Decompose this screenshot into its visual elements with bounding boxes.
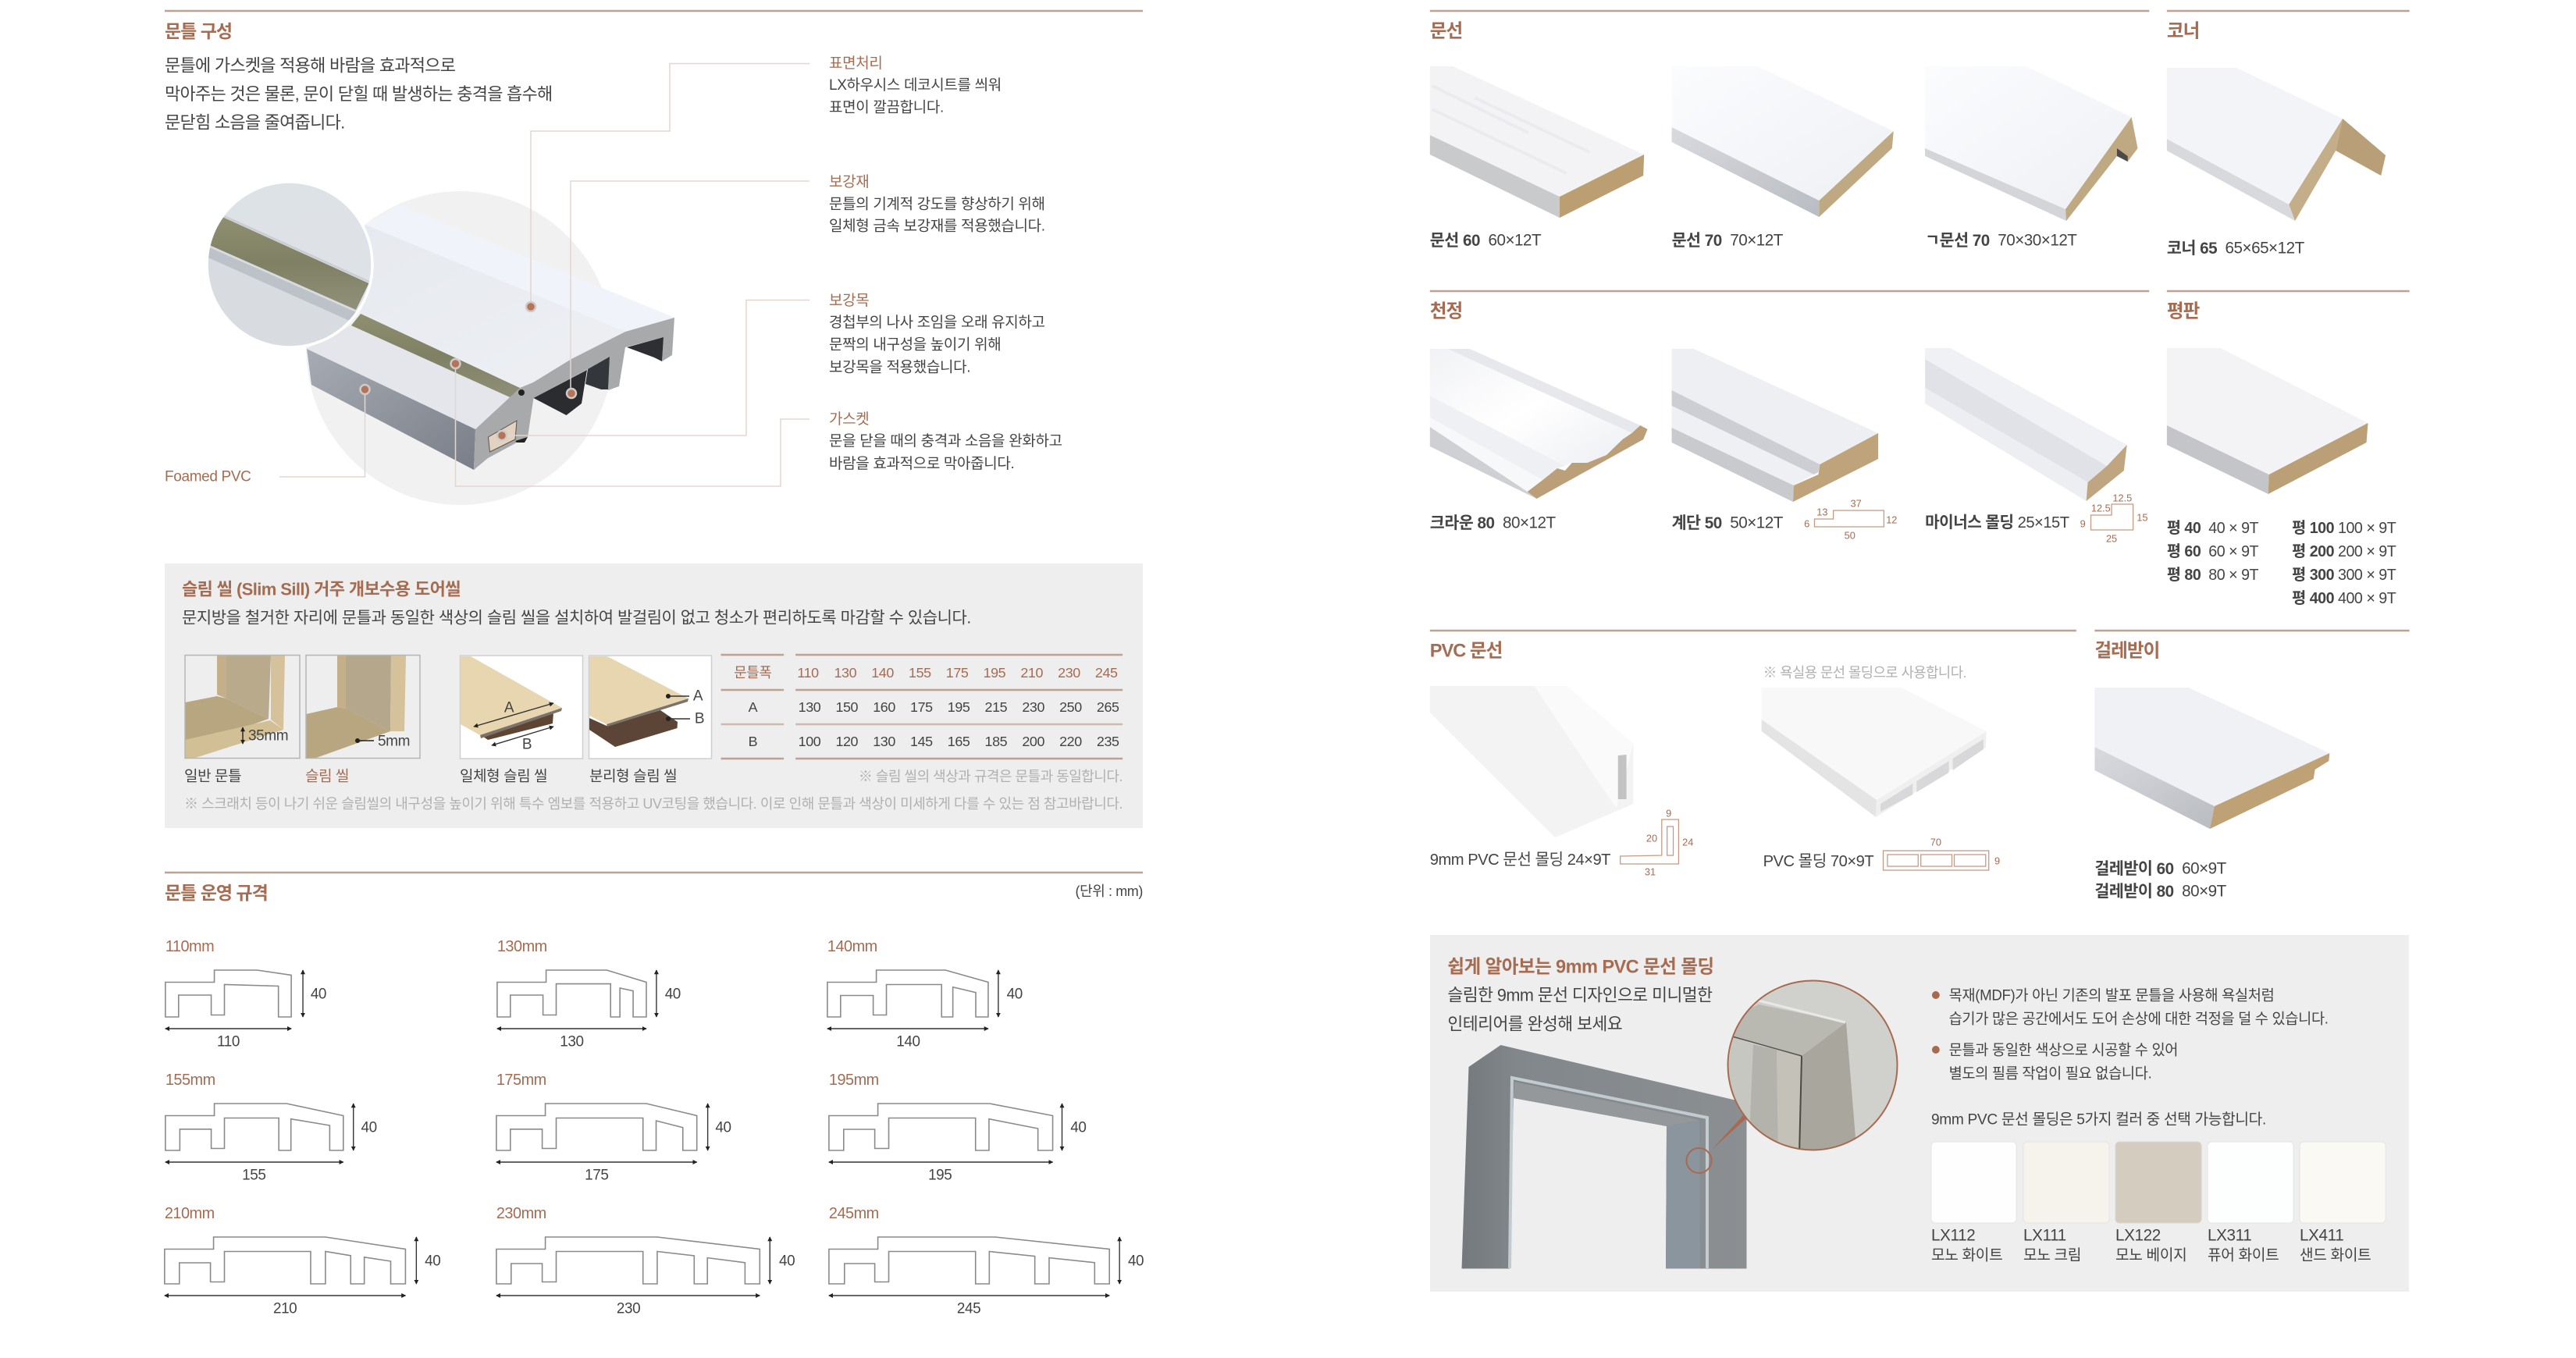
profile 195mm: 195mm bbox=[829, 1072, 879, 1089]
profile 230mm: 40 bbox=[779, 1253, 795, 1270]
callout: 가스켓: 바람을 효과적으로 막아줍니다. bbox=[829, 455, 1014, 472]
swatch: LX411 bbox=[2300, 1142, 2386, 1264]
profile 130mm: 130mm bbox=[497, 938, 547, 955]
table: sill sizes: 130 bbox=[873, 734, 895, 749]
table: sill sizes: 문틀폭 bbox=[734, 665, 771, 681]
table: sill sizes: 155 bbox=[909, 665, 931, 681]
note: sill colour: ※ 슬림 씰의 색상과 규격은 문틀과 동일합니다. bbox=[859, 769, 1123, 784]
baseboard sizes bbox=[2094, 859, 2227, 901]
table: sill sizes: 220 bbox=[1059, 734, 1082, 749]
flat board sizes bbox=[2167, 520, 2396, 607]
heading: 천정: 천정 bbox=[1430, 300, 1462, 322]
intro text: 문닫힘 소음을 줄여줍니다. bbox=[165, 112, 344, 133]
magnified detail circle bbox=[203, 181, 373, 351]
callout: 보강재: 일체형 금속 보강재를 적용했습니다. bbox=[829, 217, 1045, 234]
diagram: 계단 50 profile: 6 bbox=[1804, 517, 1809, 530]
photo: integrated sill: B bbox=[522, 737, 532, 752]
profile 110mm: 40 bbox=[311, 986, 326, 1003]
callout: 표면처리: 표면처리 bbox=[829, 55, 883, 72]
callout: 가스켓: 가스켓 bbox=[829, 411, 869, 428]
bullet: MDF: 습기가 많은 공간에서도 도어 손상에 대한 걱정을 덜 수 있습니다. bbox=[1949, 1010, 2329, 1027]
profile 130mm bbox=[497, 938, 681, 1050]
flat board sizes: 평 400 400 × 9T bbox=[2292, 590, 2396, 607]
photo: integrated sill: A bbox=[504, 699, 514, 716]
callout: 표면처리: 표면이 깔끔합니다. bbox=[829, 98, 944, 116]
profile 245mm: 40 bbox=[1128, 1253, 1144, 1270]
zoom indicator circle and connector bbox=[1686, 1115, 1746, 1173]
table: sill sizes: 265 bbox=[1097, 699, 1119, 715]
callout: 가스켓: 문을 닫을 때의 충격과 소음을 완화하고 bbox=[829, 432, 1062, 450]
diagram: 계단 50 profile: 50 bbox=[1845, 529, 1856, 542]
intro text: 막아주는 것은 물론, 문이 닫힐 때 발생하는 충격을 흡수해 bbox=[165, 84, 553, 104]
table: sill sizes: 250 bbox=[1059, 699, 1082, 715]
heading: 문틀 운영 규격: 문틀 운영 규격 bbox=[165, 883, 268, 903]
product: PVC 몰딩: PVC 몰딩 70×9T bbox=[1763, 852, 1873, 870]
table: sill sizes: 210 bbox=[1020, 665, 1043, 681]
profile 210mm: 210 bbox=[273, 1300, 297, 1317]
photo captions: 일반 문틀 bbox=[184, 768, 241, 785]
swatch: LX311 bbox=[2208, 1142, 2293, 1264]
section: frame specifications bbox=[165, 873, 1144, 1317]
product: baseboard bbox=[2094, 688, 2329, 829]
profile 140mm: 140mm bbox=[827, 938, 877, 955]
table: sill sizes: 160 bbox=[873, 699, 895, 715]
note: scratch: ※ 스크래치 등이 나기 쉬운 슬림씰의 내구성을 높이기 위해 특수 엠보를 적용하고 UV코팅을 했습니다. 이로 인해 문틀과 색상이 미세하게 다를 수 있는 점 참고바랍니다. bbox=[184, 796, 1123, 812]
product: 크라운 80 bbox=[1430, 349, 1648, 532]
product: 크라운 80: 크라운 80 80×12T bbox=[1430, 514, 1556, 532]
profile 110mm: 110 bbox=[217, 1033, 240, 1050]
diagram: 계단 50 profile: 37 bbox=[1850, 497, 1862, 510]
diagram: 마이너스 몰딩 profile: 25 bbox=[2106, 532, 2117, 545]
section: 코너 bbox=[2167, 11, 2410, 258]
product: 9mm PVC 몰딩: 9mm PVC 문선 몰딩 24×9T bbox=[1430, 851, 1610, 869]
table: sill sizes: 230 bbox=[1058, 665, 1080, 681]
table: sill sizes: 165 bbox=[948, 734, 970, 749]
product: 평판 board bbox=[2167, 348, 2368, 494]
heading: 문선: 문선 bbox=[1430, 20, 1462, 42]
section: 문선 bbox=[1430, 11, 2149, 250]
product: 문선 60: 문선 60 60×12T bbox=[1430, 231, 1542, 250]
product: door frame cross-section bbox=[307, 204, 674, 470]
profile 175mm: 40 bbox=[715, 1119, 731, 1136]
heading: PVC 문선: PVC 문선 bbox=[1430, 640, 1502, 662]
table: sill sizes: 235 bbox=[1097, 734, 1119, 749]
baseboard sizes: 걸레받이 80 80×9T bbox=[2094, 882, 2227, 901]
profile 140mm bbox=[827, 938, 1023, 1050]
heading: 코너: 코너 bbox=[2167, 20, 2199, 42]
section: 천정 bbox=[1430, 291, 2149, 545]
intro text: 문틀에 가스켓을 적용해 바람을 효과적으로 bbox=[165, 56, 456, 75]
photo: slim sill 5mm: 5mm bbox=[378, 734, 410, 749]
photo captions: 일체형 슬림 씰 bbox=[460, 768, 547, 785]
profile 155mm: 155 bbox=[242, 1167, 265, 1184]
product: 문선 70: 문선 70 70×12T bbox=[1672, 231, 1784, 250]
product: 코너 65 bbox=[2167, 68, 2386, 258]
photo: standard frame 35mm: 35mm bbox=[248, 727, 288, 745]
label: Foamed PVC: Foamed PVC bbox=[165, 468, 251, 485]
heading: 걸레받이: 걸레받이 bbox=[2094, 640, 2159, 662]
table: sill sizes: 230 bbox=[1022, 699, 1044, 715]
profile 140mm: 140 bbox=[896, 1033, 920, 1050]
subtitle: 슬림한 9mm 문선 디자인으로 미니멀한 bbox=[1447, 985, 1713, 1005]
profile 175mm bbox=[496, 1072, 731, 1184]
photo: separate sill bbox=[589, 656, 712, 759]
heading: 쉽게 알아보는: 쉽게 알아보는 9mm PVC 문선 몰딩 bbox=[1447, 956, 1714, 978]
swatch: LX411: 샌드 화이트 bbox=[2300, 1246, 2371, 1264]
leader: 보강재 bbox=[567, 181, 809, 398]
profile 230mm: 230 bbox=[617, 1300, 640, 1317]
swatch: LX122 bbox=[2115, 1142, 2201, 1264]
diagram: 마이너스 몰딩 profile: 12.5 bbox=[2091, 502, 2111, 514]
table: sill sizes: 110 bbox=[797, 665, 819, 681]
profile 175mm: 175mm bbox=[496, 1072, 546, 1089]
table: sill sizes: B bbox=[749, 734, 758, 749]
profile 130mm: 40 bbox=[665, 986, 681, 1003]
photo captions: 분리형 슬림 씰 bbox=[589, 768, 677, 785]
baseboard sizes: 걸레받이 60 60×9T bbox=[2094, 859, 2227, 878]
profile 155mm: 155mm bbox=[165, 1072, 215, 1089]
callout: 보강목: 문짝의 내구성을 높이기 위해 bbox=[829, 336, 1001, 353]
callout: 보강재: 문틀의 기계적 강도를 향상하기 위해 bbox=[829, 195, 1045, 212]
product: ㄱ문선 70: ㄱ문선 70 70×30×12T bbox=[1925, 231, 2077, 250]
callout: 표면처리: LX하우시스 데코시트를 씌워 bbox=[829, 76, 1002, 94]
table: sill sizes: 245 bbox=[1095, 665, 1118, 681]
leader: 가스켓 bbox=[451, 359, 809, 486]
diagram: 계단 50 profile: 12 bbox=[1886, 514, 1897, 526]
photo: separate sill: A bbox=[693, 688, 703, 704]
table: sill sizes: 175 bbox=[910, 699, 933, 715]
bullet: MDF: 목재(MDF)가 아닌 기존의 발포 문틀을 사용해 욕실처럼 bbox=[1949, 987, 2274, 1004]
profile 245mm: 245mm bbox=[829, 1205, 879, 1222]
flat board sizes: 평 300 300 × 9T bbox=[2292, 567, 2396, 584]
photo: standard frame 35mm bbox=[185, 656, 300, 759]
diagram: 마이너스 몰딩 profile: 15 bbox=[2137, 511, 2148, 524]
panel text block bbox=[1447, 956, 2386, 1264]
diagram: 마이너스 몰딩 profile bbox=[2080, 492, 2148, 545]
heading: 문틀 구성: 문틀 구성 bbox=[165, 21, 232, 41]
diagram: 계단 50 profile: 13 bbox=[1816, 506, 1827, 518]
intro text bbox=[165, 56, 553, 133]
swatch: LX111 bbox=[2023, 1142, 2109, 1264]
product: 마이너스 몰딩 bbox=[1925, 348, 2127, 531]
profile 210mm bbox=[165, 1205, 440, 1317]
photo: integrated sill bbox=[461, 656, 582, 759]
diagram: 9mm PVC profile bbox=[1621, 807, 1693, 878]
photo: separate sill: B bbox=[695, 710, 704, 727]
product: 문선 60 bbox=[1430, 66, 1644, 250]
callout: 보강재: 보강재 bbox=[829, 173, 869, 190]
diagram: 9mm PVC profile: 31 bbox=[1645, 866, 1656, 878]
product: 9mm PVC 몰딩 bbox=[1430, 686, 1633, 869]
leader: Foamed PVC bbox=[279, 385, 370, 477]
spec drawings grid bbox=[165, 938, 1144, 1317]
swatch: LX112: LX112 bbox=[1931, 1226, 1975, 1245]
profile 245mm bbox=[829, 1205, 1144, 1317]
table: sill sizes: 150 bbox=[835, 699, 859, 715]
swatch: LX111: 모노 크림 bbox=[2023, 1246, 2081, 1264]
table: sill sizes: 175 bbox=[946, 665, 969, 681]
profile 155mm bbox=[165, 1072, 377, 1184]
callout: 보강목: 보강목을 적용했습니다. bbox=[829, 359, 970, 376]
swatch: LX112: 모노 화이트 bbox=[1931, 1246, 2002, 1264]
product: 계단 50 bbox=[1672, 349, 1878, 532]
profile 230mm: 230mm bbox=[496, 1205, 546, 1222]
flat board sizes: 평 200 200 × 9T bbox=[2292, 543, 2396, 560]
diagram: 마이너스 몰딩 profile: 9 bbox=[2080, 517, 2086, 530]
magnified corner circle bbox=[1721, 976, 1901, 1155]
table: sill sizes: 120 bbox=[835, 734, 859, 749]
bullet: same colour: 문틀과 동일한 색상으로 시공할 수 있어 bbox=[1949, 1041, 2178, 1058]
profile 210mm: 210mm bbox=[165, 1205, 215, 1222]
swatch: LX311: LX311 bbox=[2208, 1226, 2251, 1245]
slim sill description: 문지방을 철거한 자리에 문틀과 동일한 색상의 슬림 씰을 설치하여 발걸림이 없고 청소가 편리하도록 마감할 수 있습니다. bbox=[182, 609, 971, 627]
swatch: LX311: 퓨어 화이트 bbox=[2208, 1246, 2279, 1264]
table: sill sizes bbox=[721, 655, 1123, 759]
profile 110mm: 110mm bbox=[165, 938, 214, 955]
callout: 가스켓 bbox=[829, 411, 1062, 472]
callout: 보강목: 보강목 bbox=[829, 292, 869, 309]
swatch: LX411: LX411 bbox=[2300, 1226, 2343, 1245]
profile 195mm: 40 bbox=[1070, 1119, 1087, 1136]
product: 마이너스 몰딩: 마이너스 몰딩 25×15T bbox=[1925, 514, 2069, 531]
colour note: 9mm PVC 문선 몰딩은 5가지 컬러 중 선택 가능합니다. bbox=[1931, 1111, 2266, 1129]
panel: slim sill bbox=[165, 563, 1143, 828]
subtitle: 인테리어를 완성해 보세요 bbox=[1447, 1014, 1622, 1034]
heading: slim sill: 슬림 씰 (Slim Sill) 거주 개보수용 도어씰 bbox=[182, 579, 461, 599]
panel: 9mm PVC molding bbox=[1430, 935, 2409, 1292]
profile 110mm bbox=[165, 938, 326, 1050]
profile 210mm: 40 bbox=[425, 1253, 440, 1270]
swatch: LX122: 모노 베이지 bbox=[2115, 1246, 2186, 1264]
diagram: PVC 몰딩 profile bbox=[1883, 836, 2000, 870]
profile 245mm: 245 bbox=[957, 1300, 980, 1317]
table: sill sizes: 215 bbox=[985, 699, 1008, 715]
diagram: 9mm PVC profile: 20 bbox=[1646, 832, 1657, 844]
door frame illustration bbox=[1461, 1045, 1747, 1269]
product: 계단 50: 계단 50 50×12T bbox=[1672, 514, 1784, 532]
leader: 보강목 bbox=[497, 300, 809, 440]
product: PVC 몰딩 bbox=[1762, 688, 1987, 870]
profile 155mm: 40 bbox=[361, 1119, 377, 1136]
flat board sizes: 평 100 100 × 9T bbox=[2292, 520, 2396, 537]
callout: 보강재 bbox=[829, 173, 1045, 234]
diagram: PVC 몰딩 profile: 70 bbox=[1930, 836, 1941, 848]
section: 걸레받이 bbox=[2094, 631, 2410, 901]
table: sill sizes: 100 bbox=[799, 734, 821, 749]
table: sill sizes: 130 bbox=[834, 665, 857, 681]
note: bathroom: ※ 욕실용 문선 몰딩으로 사용합니다. bbox=[1763, 665, 1966, 681]
section: PVC 문선 bbox=[1430, 631, 2076, 878]
table: sill sizes: 140 bbox=[871, 665, 894, 681]
profile 195mm: 195 bbox=[928, 1167, 952, 1184]
diagram: 9mm PVC profile: 24 bbox=[1682, 836, 1693, 848]
photo captions: 슬림 씰 bbox=[305, 768, 349, 785]
table: sill sizes: 145 bbox=[910, 734, 933, 749]
diagram: 마이너스 몰딩 profile: 12.5 bbox=[2112, 492, 2132, 504]
heading: 평판: 평판 bbox=[2167, 300, 2200, 322]
callout: 표면처리 bbox=[829, 55, 1002, 116]
table: sill sizes: 195 bbox=[984, 665, 1006, 681]
unit note: (단위 : mm) bbox=[1076, 883, 1143, 899]
background circle bbox=[306, 191, 614, 505]
flat board sizes: 평 60 60 × 9T bbox=[2167, 543, 2258, 560]
swatch: LX112 bbox=[1931, 1142, 2016, 1264]
bullet: same colour: 별도의 필름 작업이 필요 없습니다. bbox=[1949, 1065, 2151, 1082]
diagram: 9mm PVC profile: 9 bbox=[1666, 807, 1671, 819]
section: door frame construction bbox=[165, 11, 1143, 505]
profile 140mm: 40 bbox=[1007, 986, 1023, 1003]
photo captions bbox=[184, 768, 677, 785]
table: sill sizes: 130 bbox=[799, 699, 821, 715]
leader: 표면처리 bbox=[526, 64, 809, 311]
table: sill sizes: A bbox=[749, 699, 758, 715]
callout: 보강목: 경첩부의 나사 조임을 오래 유지하고 bbox=[829, 314, 1045, 331]
product: 코너 65: 코너 65 65×65×12T bbox=[2167, 239, 2304, 258]
product: 문선 70 bbox=[1672, 66, 1894, 250]
section: 평판 bbox=[2167, 291, 2410, 607]
table: sill sizes: 195 bbox=[948, 699, 970, 715]
bullet: same colour bbox=[1932, 1041, 2178, 1082]
bullet: MDF bbox=[1932, 987, 2329, 1027]
table: sill sizes: 200 bbox=[1022, 734, 1044, 749]
diagram: PVC 몰딩 profile: 9 bbox=[1994, 855, 2000, 867]
profile 175mm: 175 bbox=[585, 1167, 608, 1184]
table: sill sizes: 185 bbox=[985, 734, 1008, 749]
profile 230mm bbox=[496, 1205, 795, 1317]
profile 130mm: 130 bbox=[560, 1033, 584, 1050]
flat board sizes: 평 40 40 × 9T bbox=[2167, 520, 2258, 537]
callout: 보강목 bbox=[829, 292, 1045, 376]
product: ㄱ문선 70 bbox=[1925, 66, 2137, 250]
swatch: LX122: LX122 bbox=[2115, 1226, 2161, 1245]
diagram: 계단 50 profile bbox=[1804, 497, 1897, 542]
photo: slim sill 5mm bbox=[306, 656, 420, 759]
swatch: LX111: LX111 bbox=[2023, 1226, 2066, 1245]
flat board sizes: 평 80 80 × 9T bbox=[2167, 567, 2258, 584]
profile 195mm bbox=[829, 1072, 1087, 1184]
subtitle bbox=[1447, 985, 1713, 1034]
right page: product catalogue bbox=[1430, 11, 2410, 901]
